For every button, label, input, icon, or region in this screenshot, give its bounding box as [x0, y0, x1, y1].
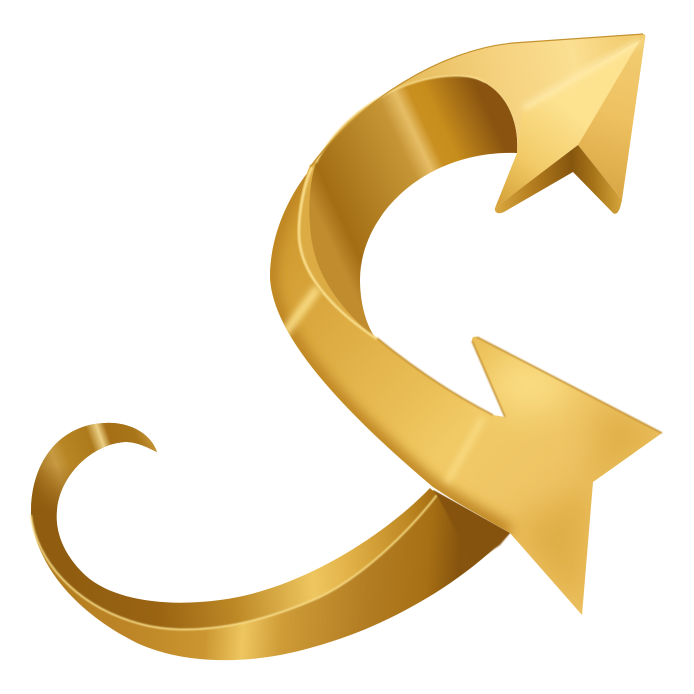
head: lower left facet [495, 40, 640, 208]
tail: shadow facet behind band [433, 490, 510, 563]
head: right facet [578, 36, 647, 200]
fold strip between band and inner face [297, 160, 380, 342]
band: top edge shading [377, 337, 662, 433]
band: diagonal stripe highlight [283, 284, 322, 338]
ribbon: top edge rim [316, 76, 485, 163]
band: outer edge shading [270, 167, 510, 533]
band: fold highlight [447, 418, 483, 482]
head: right tip shade [584, 404, 661, 484]
tail: highlight line [31, 495, 437, 629]
tail: upper inner face and curl [30, 422, 433, 630]
head: bevel under barbs [495, 145, 622, 214]
inner face of upper ribbon [309, 76, 517, 340]
head: ridge highlight [523, 40, 640, 108]
upper ribbon and arrow head [310, 34, 647, 214]
main band and lower arrow head [270, 167, 670, 615]
fold highlight line on ribbon [299, 167, 377, 339]
ribbon: outer edge shade [310, 34, 643, 167]
head: lower shade [510, 482, 593, 615]
tail: lower outer face of ribbon [31, 490, 510, 660]
head: light zone [490, 357, 570, 413]
